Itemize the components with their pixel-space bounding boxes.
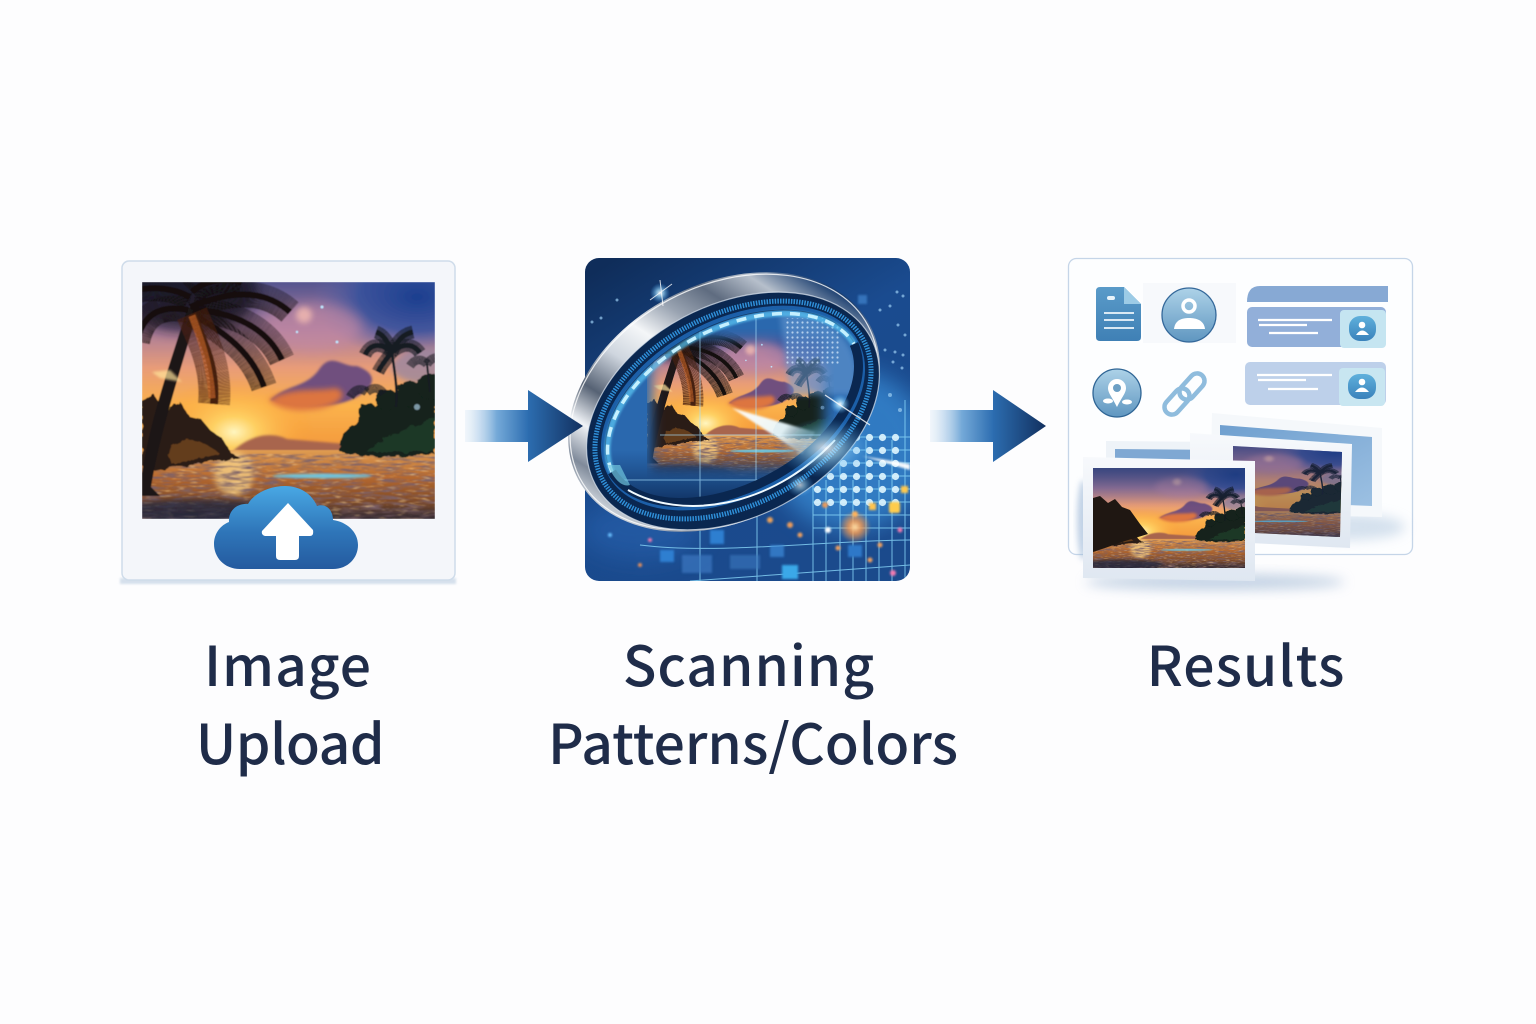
icon: location pin — [1093, 369, 1141, 417]
sunset photo — [142, 282, 435, 519]
front photo — [1080, 448, 1290, 581]
label: scanning patterns and colors: Patterns/Colors — [548, 700, 958, 780]
label: image upload: Image — [204, 622, 372, 702]
label: scanning patterns and colors — [548, 622, 958, 780]
back left sheet — [1106, 441, 1233, 470]
label: results: Results — [1147, 622, 1345, 702]
photo stack — [1080, 413, 1395, 581]
icon: document — [1096, 287, 1141, 341]
magnifier ring — [568, 272, 880, 532]
dot matrix — [814, 434, 900, 506]
result card 1 — [1247, 286, 1388, 348]
result card 2 — [1245, 362, 1386, 406]
scan background — [580, 258, 930, 581]
scan beam — [732, 394, 910, 497]
world dots — [590, 290, 906, 412]
arrow: scanning to results — [930, 390, 1046, 462]
icon: cloud upload — [214, 486, 358, 569]
panel: results — [1068, 258, 1412, 590]
label: image upload — [196, 622, 384, 780]
lens view — [606, 310, 854, 498]
label: image upload: Upload — [196, 700, 384, 780]
icon: chain link — [1161, 370, 1208, 418]
soft shadows — [1077, 480, 1405, 590]
icon: user profile — [1162, 288, 1216, 342]
back blue sheet — [1210, 413, 1382, 517]
lens highlights — [608, 314, 854, 472]
label: scanning patterns and colors: Scanning — [623, 622, 875, 702]
panel: scanning — [523, 220, 930, 584]
scan grid — [640, 400, 910, 581]
data lights — [608, 295, 908, 579]
panel: image upload — [117, 235, 522, 584]
arrow: upload to scanning — [465, 390, 583, 462]
middle photo — [1190, 435, 1352, 548]
